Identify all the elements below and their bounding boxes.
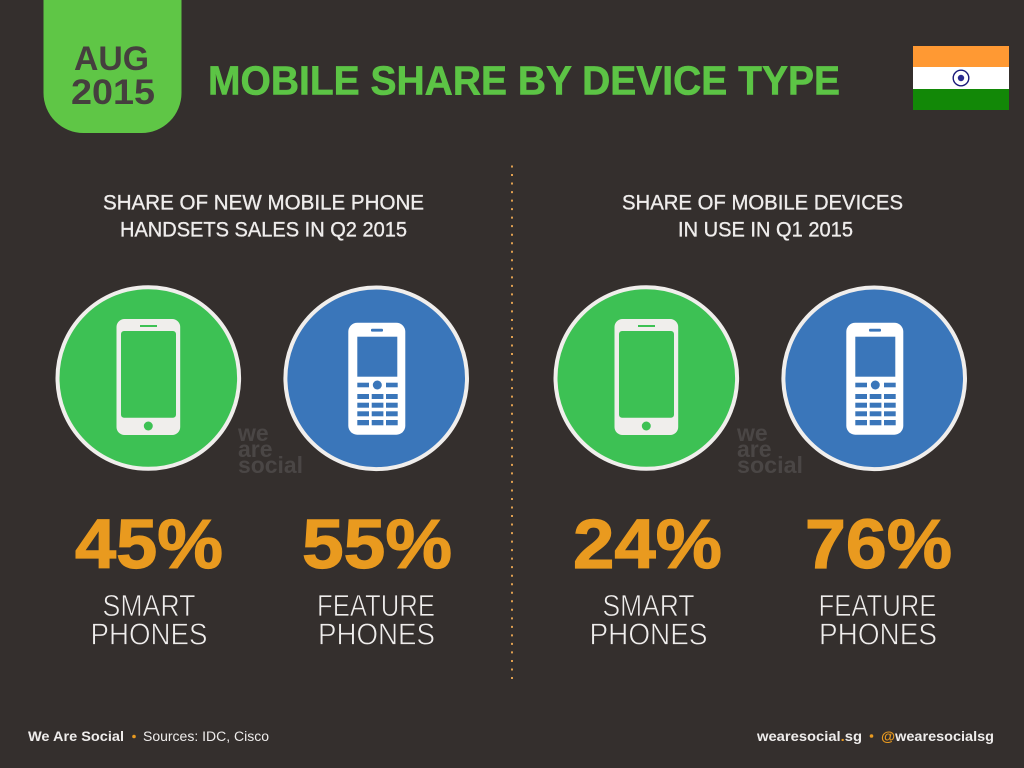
footer: sources: Sources: IDC, Cisco: [143, 729, 269, 744]
stat: 45% smart phones: PHONES: [90, 618, 208, 652]
panel: new handset sales: [58, 190, 467, 652]
heading: devices in use: [622, 190, 903, 242]
heading: new handset sales: HANDSETS SALES IN Q2 2015: [120, 218, 407, 242]
heading: new handset sales: SHARE OF NEW MOBILE PHONE: [103, 190, 424, 214]
stat: 24% smart phones: 24%: [573, 505, 722, 583]
stat: 45% smart phones: [75, 505, 223, 652]
stat: 45% smart phones: 45%: [75, 505, 223, 583]
watermark: [237, 420, 303, 478]
stat: 55% feature phones: PHONES: [318, 618, 435, 652]
watermark: [736, 420, 803, 478]
icon: feature phone: [285, 288, 467, 469]
footer: website and handle: wearesocial .sg: [756, 729, 862, 744]
footer: sources: We Are Social: [28, 729, 124, 744]
footer: website and handle: [756, 729, 994, 744]
stat: 76% feature phones: FEATURE: [818, 589, 936, 623]
stat: 76% feature phones: PHONES: [819, 618, 937, 652]
watermark: social: [737, 452, 803, 478]
watermark: we: [237, 420, 269, 446]
stat: 55% feature phones: FEATURE: [317, 589, 435, 623]
stat: 24% smart phones: [573, 505, 722, 652]
date tab: [44, 0, 182, 133]
stat: 76% feature phones: 76%: [805, 505, 952, 583]
watermark: are: [737, 436, 772, 462]
stat: 55% feature phones: 55%: [302, 505, 452, 583]
heading: devices in use: IN USE IN Q1 2015: [678, 218, 853, 242]
dotted divider: [511, 166, 513, 680]
stat: 76% feature phones: [805, 505, 952, 652]
stat: 55% feature phones: [302, 505, 452, 652]
heading: new handset sales: [103, 190, 424, 242]
heading: devices in use: SHARE OF MOBILE DEVICES: [622, 190, 903, 214]
footer: sources: [28, 729, 269, 744]
footer: website and handle: @wearesocialsg: [881, 729, 994, 744]
date tab: 2015: [71, 73, 155, 112]
stat: 24% smart phones: SMART: [602, 589, 694, 623]
panel: devices in use: [556, 190, 965, 652]
icon: feature phone: [783, 288, 965, 469]
icon: India flag: [913, 46, 1009, 110]
stat: 24% smart phones: PHONES: [590, 618, 708, 652]
watermark: we: [736, 420, 768, 446]
date tab: AUG: [74, 40, 149, 78]
title: MOBILE SHARE BY DEVICE TYPE: [208, 58, 840, 104]
icon: smartphone: [556, 287, 737, 469]
stat: 45% smart phones: SMART: [102, 589, 196, 623]
watermark: are: [238, 436, 273, 462]
watermark: social: [238, 452, 303, 478]
icon: smartphone: [58, 287, 239, 469]
